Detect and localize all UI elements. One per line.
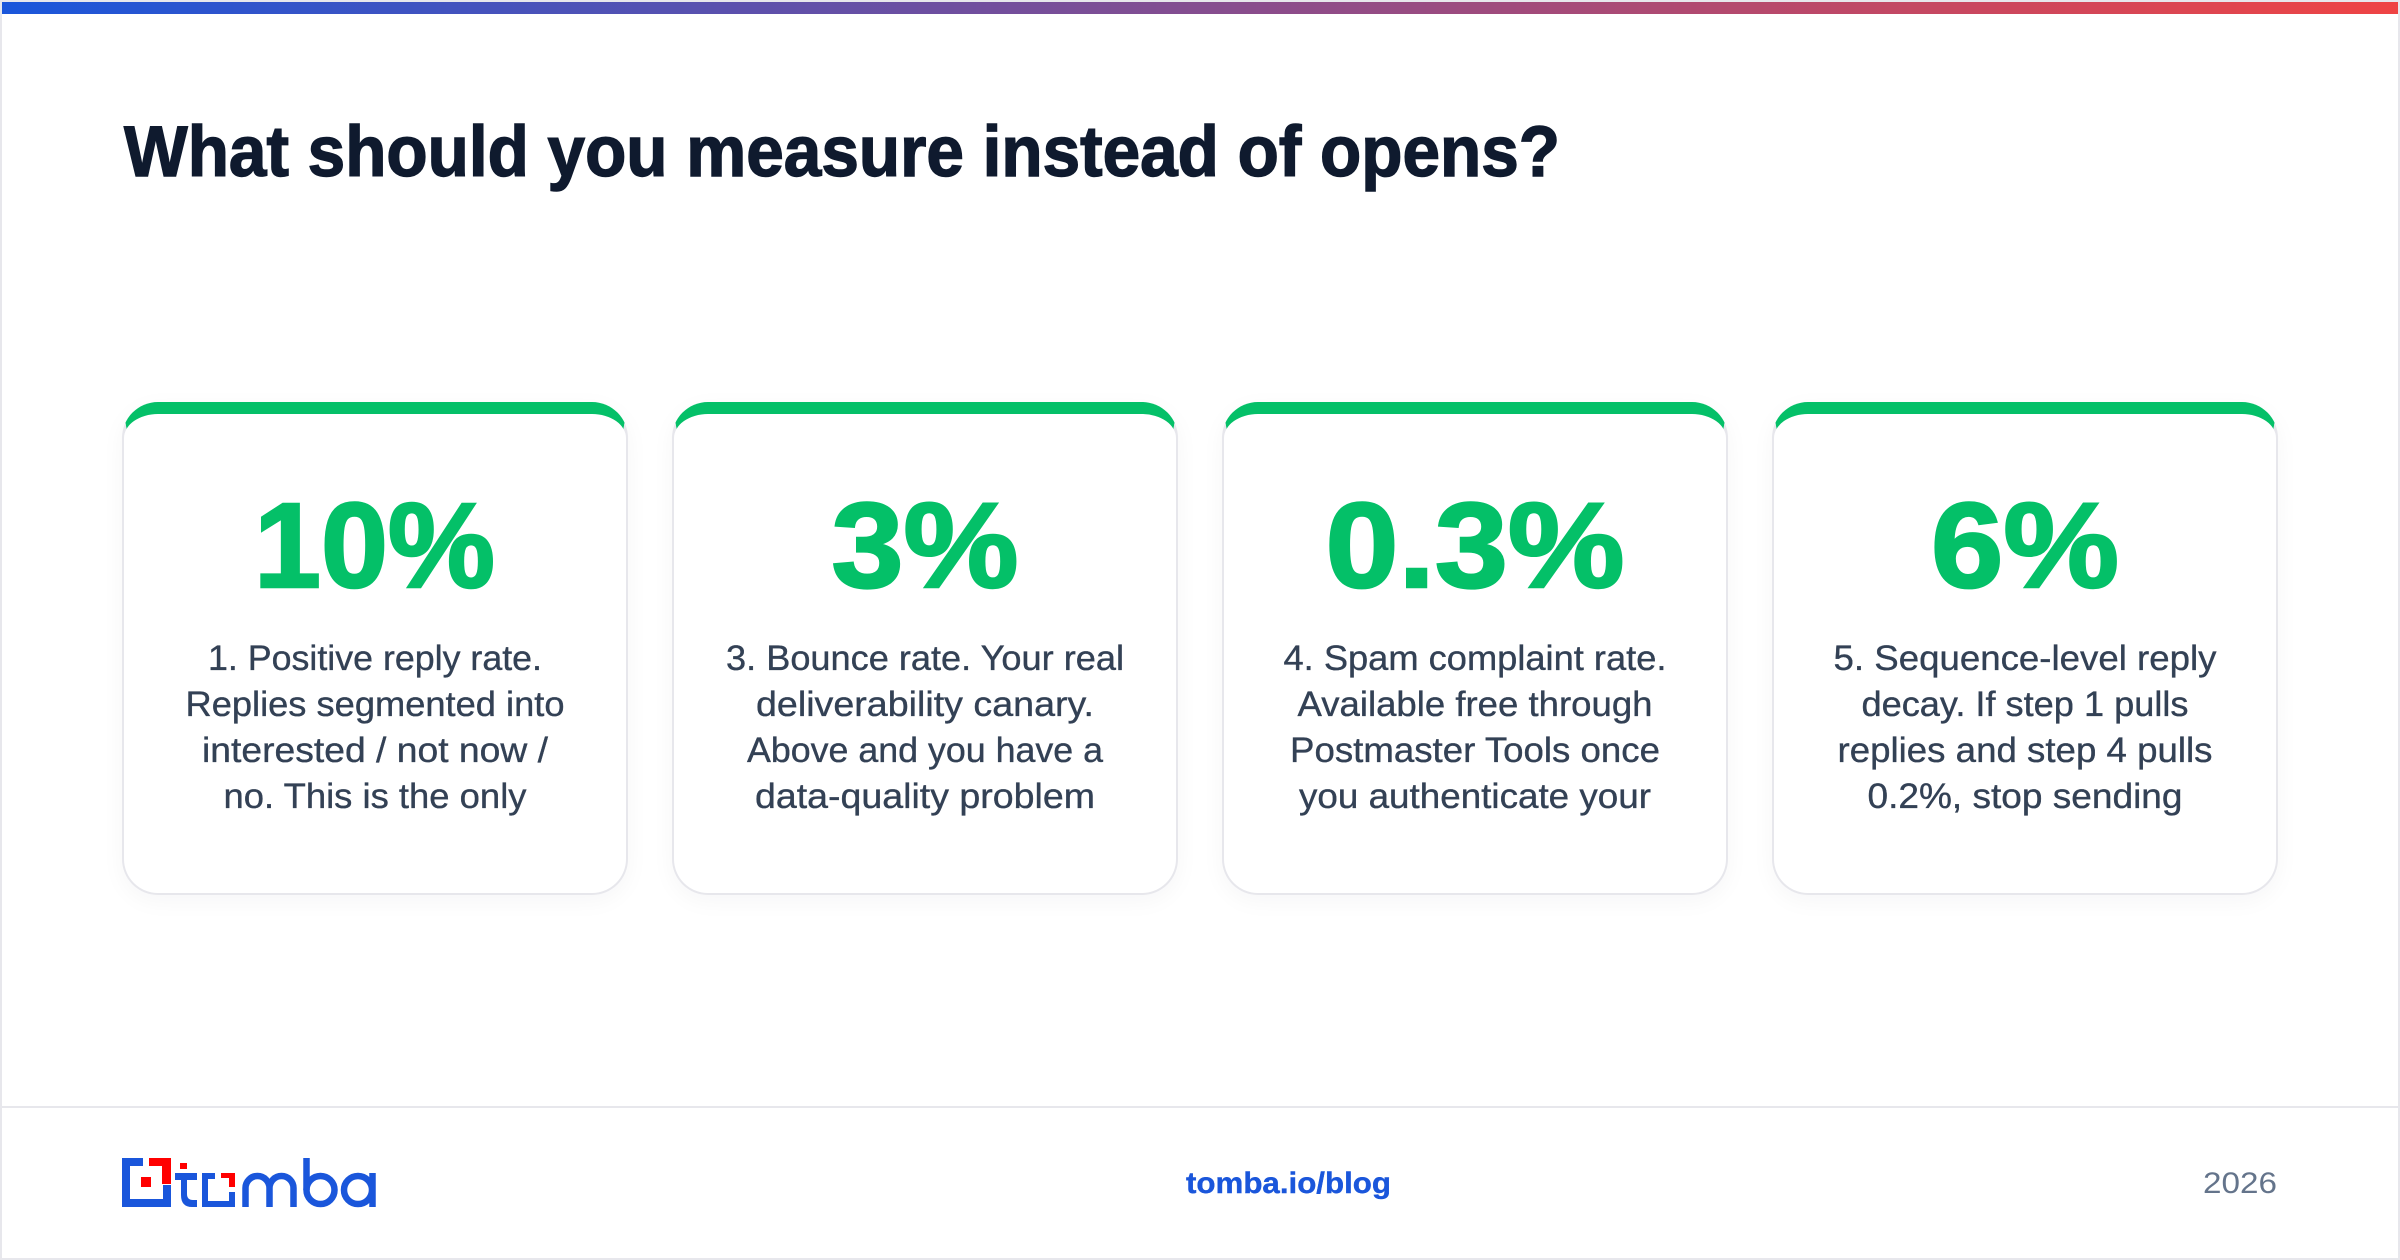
description: spam complaint rate: Postmaster Tools once: [1290, 731, 1660, 770]
description: positive reply rate: [186, 639, 564, 816]
top gradient bar: [2, 2, 2398, 14]
footer: [122, 1158, 2277, 1208]
icon: tomba logo: [122, 1158, 372, 1207]
description: sequence-level reply decay: 0.2%, stop sending: [1868, 777, 2182, 816]
panel: bounce rate: [672, 402, 1178, 895]
description: spam complaint rate: 4. Spam complaint rate.: [1284, 639, 1666, 678]
panel: spam complaint rate: [1222, 402, 1728, 895]
stat: 10%: 10%: [254, 477, 495, 613]
description: bounce rate: data-quality problem: [755, 777, 1095, 816]
description: positive reply rate: no. This is the only: [224, 777, 527, 816]
stat: 0.3%: 0.3%: [1326, 477, 1624, 613]
description: sequence-level reply decay: [1834, 639, 2217, 816]
description: sequence-level reply decay: replies and step 4 pulls: [1838, 731, 2212, 770]
description: positive reply rate: Replies segmented into: [186, 685, 564, 724]
description: spam complaint rate: you authenticate your: [1299, 777, 1651, 816]
description: bounce rate: [726, 639, 1124, 816]
description: positive reply rate: interested / not now /: [202, 731, 548, 770]
description: bounce rate: Above and you have a: [747, 731, 1104, 770]
stat: 3%: 3%: [832, 477, 1018, 613]
description: spam complaint rate: Available free through: [1298, 685, 1652, 724]
description: bounce rate: deliverability canary.: [756, 685, 1094, 724]
panel: sequence-level reply decay: [1772, 402, 2278, 895]
panel: positive reply rate: [122, 402, 628, 895]
description: bounce rate: 3. Bounce rate. Your real: [726, 639, 1124, 678]
stat: 6%: 6%: [1931, 477, 2119, 613]
description: positive reply rate: 1. Positive reply rate.: [208, 639, 542, 678]
description: sequence-level reply decay: decay. If step 1 pulls: [1862, 685, 2188, 724]
title: What should you measure instead of opens?: [124, 113, 1560, 192]
footer year: 2026: [2203, 1167, 2277, 1200]
footer link: tomba.io/blog: [1186, 1167, 1391, 1200]
description: sequence-level reply decay: 5. Sequence-level reply: [1834, 639, 2217, 678]
description: spam complaint rate: [1284, 639, 1666, 816]
